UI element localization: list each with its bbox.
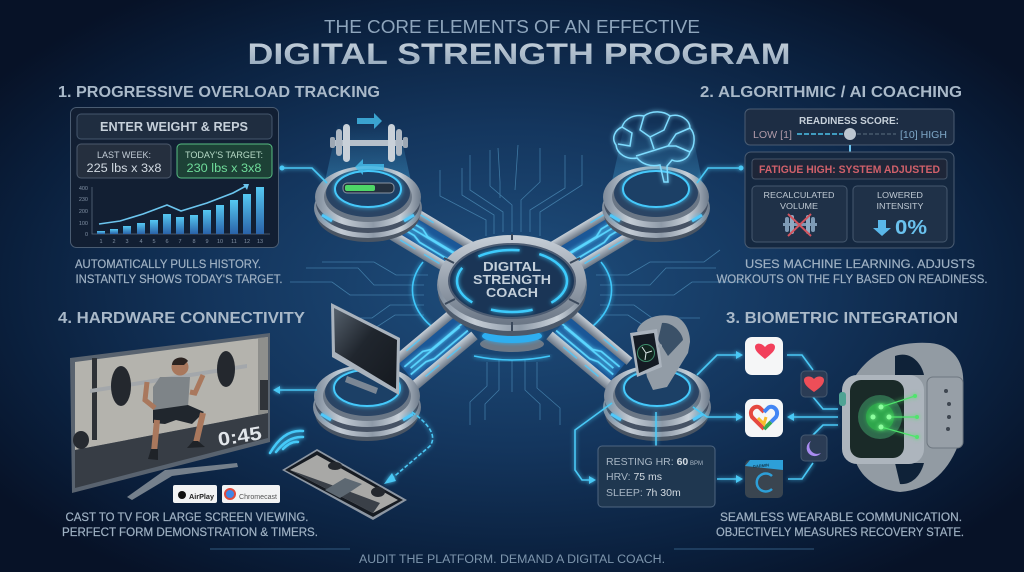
caption 3 — [716, 512, 964, 539]
bar chart: 3 — [125, 239, 129, 245]
connector rails — [385, 202, 639, 389]
biometric data box: SLEEP: 7h 30m — [606, 487, 681, 499]
AirPlay badge: AirPlay — [189, 492, 215, 501]
panel: algorithmic AI coaching — [700, 84, 988, 286]
icon: small monitor — [331, 303, 400, 395]
caption 1: AUTOMATICALLY PULLS HISTORY. — [75, 259, 261, 271]
television with workout video — [70, 333, 270, 500]
Chromecast badge: Chromecast — [239, 494, 277, 501]
readiness score slider: [10] HIGH — [900, 129, 947, 141]
icon: heart badge — [801, 371, 827, 397]
bar chart: 5 — [152, 239, 156, 245]
caption 2: USES MACHINE LEARNING. ADJUSTS — [745, 259, 975, 271]
sensor dots and rays — [870, 394, 919, 439]
bar chart: 400 — [79, 186, 88, 192]
icon: brain — [614, 112, 694, 182]
Chromecast badge — [222, 485, 280, 503]
icon: fitness heart app — [745, 399, 783, 437]
bar chart: 4 — [139, 239, 143, 245]
caption 1 — [75, 259, 282, 286]
bar chart: 12 — [244, 239, 250, 245]
title — [248, 17, 790, 71]
title: DIGITAL STRENGTH PROGRAM — [248, 38, 790, 71]
caption 3: SEAMLESS WEARABLE COMMUNICATION. — [720, 512, 962, 524]
recalculated volume box — [752, 186, 847, 242]
panel: hardware connectivity — [58, 310, 407, 539]
heading 2: 2. ALGORITHMIC / AI COACHING — [700, 84, 962, 101]
hub label — [473, 259, 551, 300]
readiness score slider: LOW [1] — [753, 129, 792, 141]
bar chart: 8 — [192, 239, 196, 245]
icon: health app — [745, 337, 783, 375]
biometric data box: HRV: 75 ms — [606, 471, 662, 483]
pod 3: wearable watch — [603, 315, 711, 441]
today's target box — [177, 144, 272, 178]
caption 4: CAST TO TV FOR LARGE SCREEN VIEWING. — [66, 512, 308, 524]
readiness score slider: READINESS SCORE: — [799, 116, 899, 127]
icon: garmin app — [745, 460, 783, 498]
today's target box: TODAY'S TARGET: — [185, 150, 263, 161]
panel: biometric integration — [598, 310, 964, 539]
caption 4: PERFECT FORM DEMONSTRATION & TIMERS. — [62, 527, 318, 539]
fatigue alert — [752, 159, 947, 179]
biometric data box: RESTING HR: 60 BPM — [606, 456, 703, 468]
fatigue alert: FATIGUE HIGH: SYSTEM ADJUSTED — [759, 164, 940, 176]
pod 4: television — [313, 303, 421, 441]
title: THE CORE ELEMENTS OF AN EFFECTIVE — [324, 17, 700, 37]
heading 3: 3. BIOMETRIC INTEGRATION — [726, 310, 958, 327]
icon: progress arrows — [355, 113, 384, 175]
bar chart: 13 — [257, 239, 263, 245]
icon: dumbbell — [330, 124, 408, 162]
pod 1: dumbbell and progress bar — [314, 113, 422, 242]
hub label: STRENGTH — [473, 272, 551, 287]
bar chart: 2 — [112, 239, 116, 245]
hub label: COACH — [486, 285, 538, 300]
circuit traces — [290, 145, 745, 425]
caption 2: WORKOUTS ON THE FLY BASED ON READINESS. — [716, 274, 988, 286]
caption 2 — [716, 259, 988, 286]
bar chart: 6 — [165, 239, 169, 245]
last week box — [77, 144, 171, 178]
bar chart: 100 — [79, 221, 88, 227]
last week box: 225 lbs x 3x8 — [86, 163, 162, 175]
recalculated volume box: RECALCULATED — [764, 190, 834, 200]
today's target box: 230 lbs x 3x8 — [186, 163, 262, 175]
last week box: LAST WEEK: — [97, 150, 151, 161]
bar chart: 200 — [79, 209, 88, 215]
large smartwatch with sensors — [839, 343, 963, 492]
enter weight box: ENTER WEIGHT & REPS — [100, 119, 248, 134]
phone with workout video — [282, 449, 407, 520]
icon: small smartwatch — [630, 315, 690, 390]
readiness score slider — [745, 109, 954, 152]
lowered intensity box: INTENSITY — [876, 201, 924, 211]
biometric data box — [598, 446, 715, 507]
caption 1: INSTANTLY SHOWS TODAY'S TARGET. — [76, 274, 282, 286]
athlete with barbell — [90, 351, 247, 460]
lowered intensity box: LOWERED — [877, 190, 923, 200]
lowered intensity box: 0% — [895, 217, 927, 239]
icon: wifi — [270, 431, 303, 453]
recalculated volume box: VOLUME — [780, 201, 818, 211]
bar chart: 230 — [79, 197, 88, 203]
pod 2: AI brain — [602, 112, 710, 242]
central hub — [437, 234, 587, 352]
bar chart: 7 — [178, 239, 182, 245]
heading 4: 4. HARDWARE CONNECTIVITY — [58, 310, 305, 327]
icon: sleep badge — [801, 435, 827, 461]
bar chart: 9 — [205, 239, 209, 245]
enter weight box — [77, 114, 272, 139]
progress bar — [343, 183, 394, 193]
arrows and data links — [273, 166, 838, 484]
icon: garmin app: GARMIN — [753, 462, 769, 469]
bar chart: 0 — [85, 232, 88, 238]
caption 4 — [62, 512, 318, 539]
panel: progressive overload tracking — [58, 84, 380, 286]
caption 3: OBJECTIVELY MEASURES RECOVERY STATE. — [716, 527, 964, 539]
icon: crossed dumbbell — [783, 214, 817, 236]
lowered intensity box — [853, 186, 947, 242]
bar chart: 11 — [231, 239, 237, 245]
heading 1: 1. PROGRESSIVE OVERLOAD TRACKING — [58, 84, 380, 101]
television with workout video: 0:45 — [216, 423, 264, 451]
AirPlay badge — [173, 485, 217, 503]
footer banner: AUDIT THE PLATFORM. DEMAND A DIGITAL COACH. — [359, 554, 665, 566]
hub label: DIGITAL — [483, 259, 541, 274]
bar chart: 10 — [217, 239, 223, 245]
bar chart — [79, 184, 270, 245]
bar chart: 1 — [99, 239, 103, 245]
